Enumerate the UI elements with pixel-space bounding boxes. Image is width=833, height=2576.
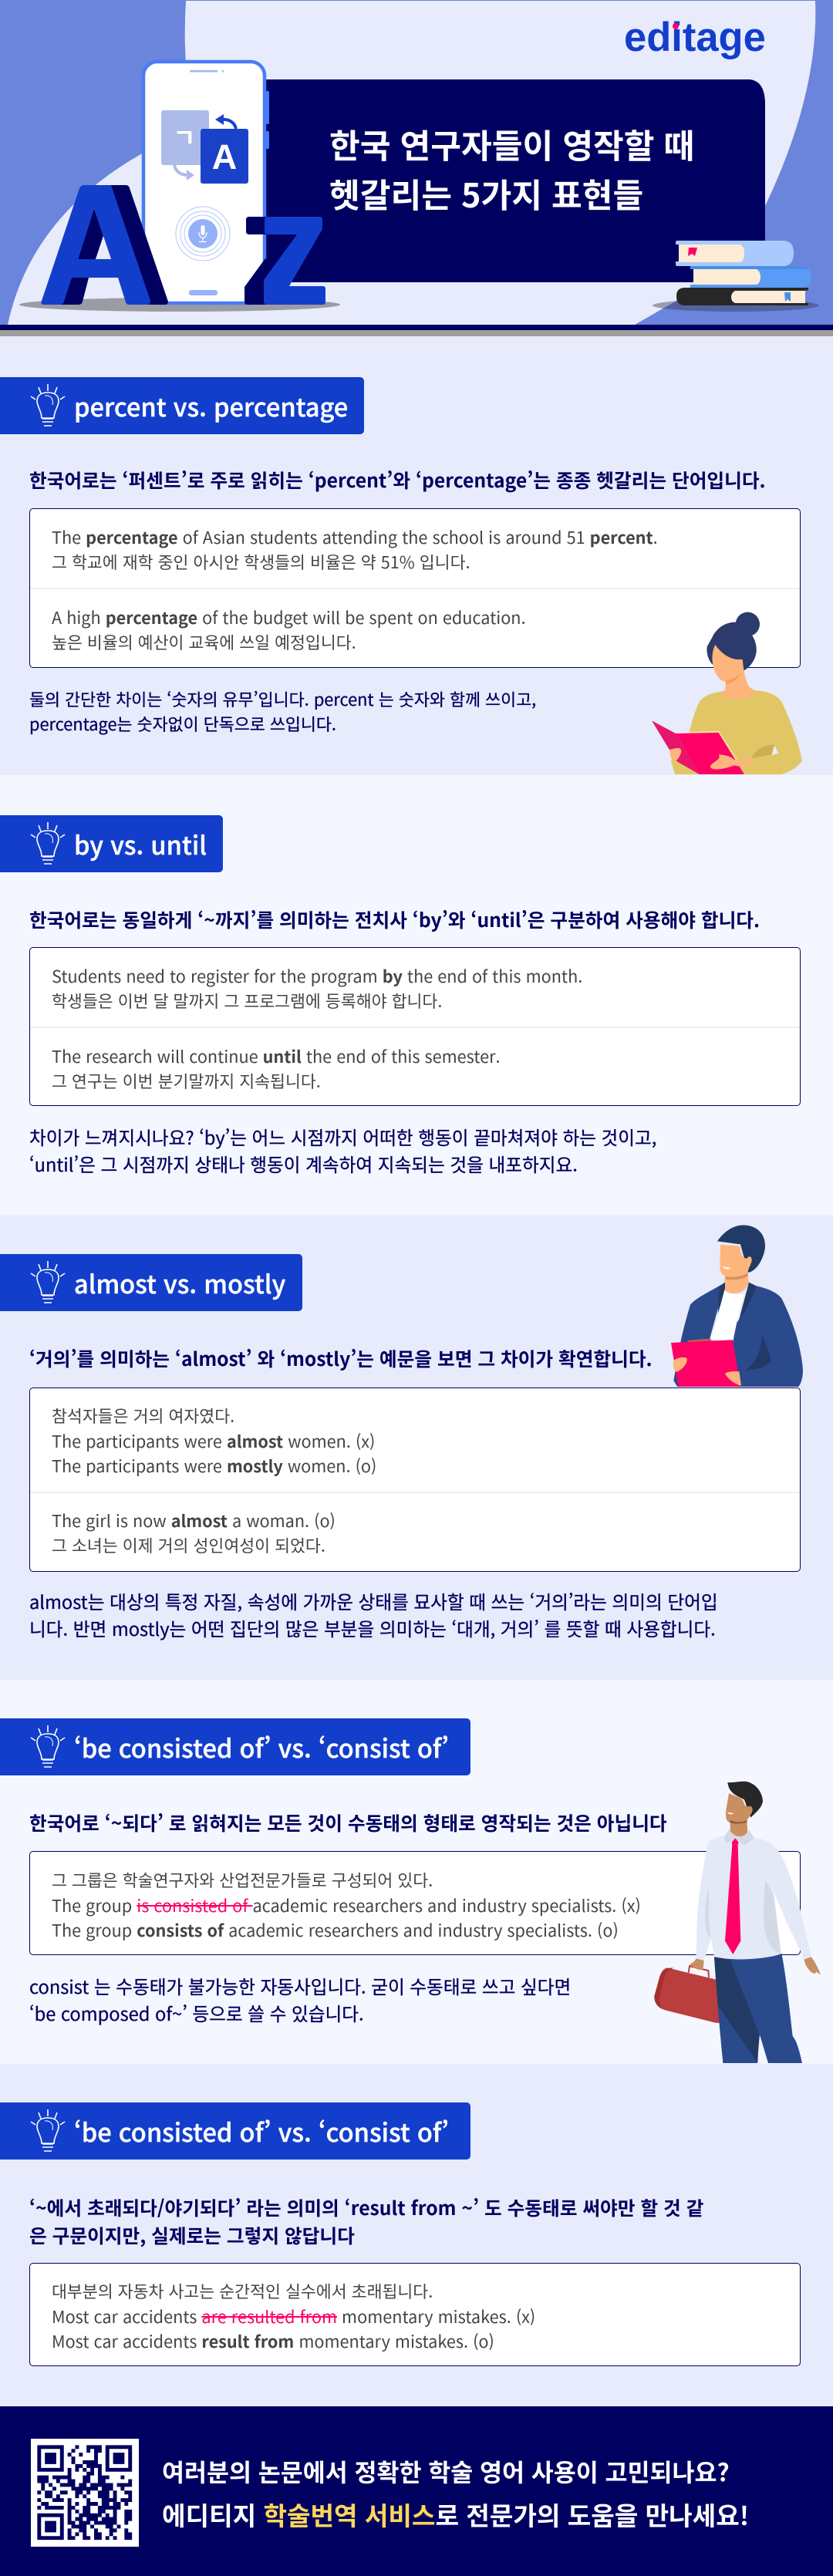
tag heading [0,377,364,434]
example box: 그 소녀는 이제 거의 성인여성이 되었다. [52,1533,325,1557]
section 2: by vs. until [0,775,833,1216]
ground shadow [19,298,340,312]
illustration: woman reading [652,612,802,774]
letter A [41,185,168,305]
example box: The percentage of Asian students attending the school is around 51 percent. [52,525,658,549]
title [329,120,694,217]
explanation: almost는 대상의 특정 자질, 속성에 가까운 상태를 묘사할 때 쓰는 ‘거의’라는 의미의 단어입 [29,1588,718,1614]
title panel [262,79,765,282]
example box: 참석자들은 거의 여자였다. [52,1404,234,1428]
tag heading [0,815,223,872]
explanation: ‘be composed of~’ 등으로 쓸 수 있습니다. [29,2000,364,2026]
tag heading: ‘be consisted of’ vs. ‘consist of’ [74,2113,449,2149]
example box: 대부분의 자동차 사고는 순간적인 실수에서 초래됩니다. [52,2279,433,2303]
example box: 높은 비율의 예산이 교육에 쓰일 예정입니다. [52,630,356,654]
logo: editage [624,15,766,60]
example box: The group is consisted of academic researchers and industry specialists. (x) [52,1893,641,1917]
example box: The participants were mostly women. (o) [52,1454,376,1478]
subheading: 은 구문이지만, 실제로는 그렇지 않답니다 [29,2221,355,2249]
example box [29,1387,801,1572]
explanation: percentage는 숫자없이 단독으로 쓰입니다. [29,712,336,736]
explanation [29,687,536,736]
icon: light bulb [31,384,65,427]
explanation [29,1124,656,1177]
icon: light bulb [31,1725,65,1768]
example box: The girl is now almost a woman. (o) [52,1509,336,1532]
example box [29,2263,801,2366]
example box: 그 학교에 재학 중인 아시안 학생들의 비율은 약 51% 입니다. [52,550,470,574]
example box: Most car accidents result from momentary mistakes. (o) [52,2329,494,2353]
tag heading [0,2102,470,2160]
icon: microphone [176,207,230,261]
subheading: 한국어로는 ‘퍼센트’로 주로 읽히는 ‘percent’와 ‘percentage’는 종종 헷갈리는 단어입니다. [29,466,766,494]
footer call to action [0,2406,833,2576]
example box: The group consists of academic researchers and industry specialists. (o) [52,1918,619,1942]
subheading: ‘~에서 초래되다/야기되다’ 라는 의미의 ‘result from ~’ 도 수동태로 써야만 할 것 같 [29,2193,703,2221]
example box: The participants were almost women. (x) [52,1429,375,1453]
section 1: percent vs. percentage [0,336,833,775]
example box: Most car accidents are resulted from momentary mistakes. (x) [52,2305,535,2328]
icon: translate [161,110,248,184]
phone [143,62,269,303]
section 4: be consisted of vs. consist of [0,1680,833,2064]
call to action text: 여러분의 논문에서 정확한 학술 영어 사용이 고민되나요? [162,2453,730,2489]
header rule [0,325,833,330]
tag heading: by vs. until [74,825,207,862]
header banner [0,0,833,336]
example box: Students need to register for the program by the end of this month. [52,964,582,988]
call to action text: 에디티지 학술번역 서비스로 전문가의 도움을 만나세요! [162,2495,749,2533]
explanation: consist 는 수동태가 불가능한 자동사입니다. 굳이 수동태로 쓰고 싶다면 [29,1973,571,1999]
tag heading: percent vs. percentage [74,387,348,424]
explanation: ‘until’은 그 시점까지 상태나 행동이 계속하여 지속되는 것을 내포하지요. [29,1151,578,1177]
explanation: 둘의 간단한 차이는 ‘숫자의 유무’입니다. percent 는 숫자와 함께 쓰이고, [29,687,536,711]
icon: translate: A [212,137,237,177]
illustration: man with clipboard [671,1225,803,1387]
title: 헷갈리는 5가지 표현들 [329,170,643,217]
subheading: 한국어로 ‘~되다’ 로 읽혀지는 모든 것이 수동태의 형태로 영작되는 것은 아닙니다 [29,1809,667,1836]
example box: 학생들은 이번 달 말까지 그 프로그램에 등록해야 합니다. [52,989,442,1013]
example box [29,1851,801,1955]
explanation: 차이가 느껴지시나요? ‘by’는 어느 시점까지 어떠한 행동이 끝마쳐져야 하는 것이고, [29,1124,656,1150]
subheading: 한국어로는 동일하게 ‘~까지’를 의미하는 전치사 ‘by’와 ‘until’은 구분하여 사용해야 합니다. [29,905,760,933]
tag heading: ‘be consisted of’ vs. ‘consist of’ [74,1729,449,1765]
letter Z [245,217,325,305]
icon: translate: ㄱ [173,119,196,154]
QR code [31,2439,139,2547]
icon: light bulb [31,822,65,865]
tag heading: almost vs. mostly [74,1265,285,1300]
title: 한국 연구자들이 영작할 때 [329,120,694,168]
subheading [29,2193,703,2249]
example box: The research will continue until the end of this semester. [52,1044,501,1068]
section 5: result from [0,2064,833,2406]
tag heading [0,1718,470,1775]
explanation [29,1588,718,1641]
header illustration [0,1,833,336]
icon: light bulb [31,1261,65,1303]
example box: 그 그룹은 학술연구자와 산업전문가들로 구성되어 있다. [52,1868,433,1892]
illustration: man with briefcase [654,1782,821,2063]
books [653,241,819,312]
section 3: almost vs. mostly [0,1216,833,1680]
explanation: 니다. 반면 mostly는 어떤 집단의 많은 부분을 의미하는 ‘대개, 거의’ 를 뜻할 때 사용합니다. [29,1615,716,1641]
example box: A high percentage of the budget will be spent on education. [52,605,526,629]
example box: 그 연구는 이번 분기말까지 지속됩니다. [52,1069,321,1093]
example box [29,947,801,1106]
icon: light bulb [31,2109,65,2152]
explanation [29,1973,571,2026]
call to action text [162,2453,749,2533]
tag heading [0,1254,302,1311]
subheading: ‘거의’를 의미하는 ‘almost’ 와 ‘mostly’는 예문을 보면 그 차이가 확연합니다. [29,1344,653,1372]
example box [29,508,801,668]
